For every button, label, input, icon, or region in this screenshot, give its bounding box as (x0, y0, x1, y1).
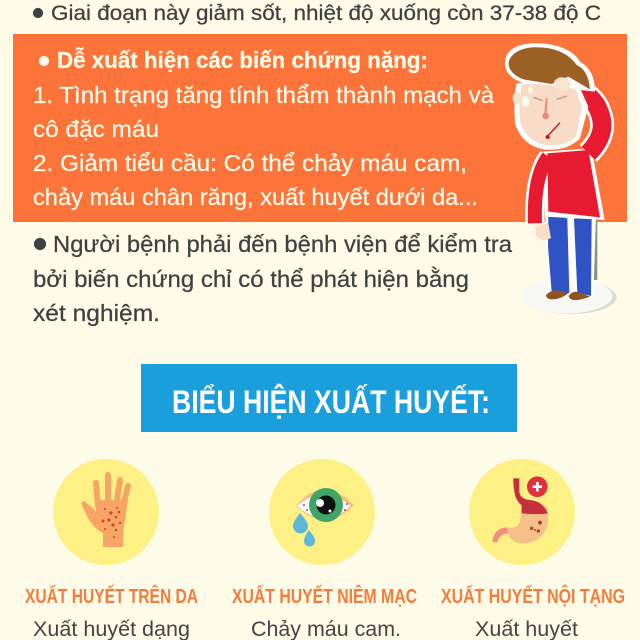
hospital advice text (33, 231, 513, 326)
hospital advice text: bởi biến chứng chỉ có thể phát hiện bằng (33, 266, 469, 292)
icon: hand with rash (53, 459, 159, 565)
icon: sick person (505, 43, 617, 314)
heading: XUẤT HUYẾT NIÊM MẠC (232, 584, 417, 608)
complications text: Dễ xuất hiện các biến chứng nặng: (57, 46, 428, 73)
icon: bleeding eye (269, 459, 375, 565)
hospital advice text: Người bệnh phải đến bệnh viện để kiểm tra (53, 231, 513, 257)
icon: stomach (469, 459, 575, 565)
complications text: 2. Giảm tiểu cầu: Có thể chảy máu cam, (33, 150, 467, 176)
column: internal bleeding (441, 459, 625, 640)
intro text line: Giai đoạn này giảm sốt, nhiệt độ xuống còn 37-38 độ C (51, 2, 601, 25)
hospital advice text: xét nghiệm. (33, 300, 160, 326)
section banner (141, 364, 517, 432)
complications text (33, 46, 495, 210)
banner title: BIỂU HIỆN XUẤT HUYẾT: (172, 384, 490, 420)
column: mucosal bleeding (232, 459, 417, 640)
complications text: 1. Tình trạng tăng tính thẩm thành mạch và (33, 82, 495, 108)
panel: complications (13, 34, 627, 222)
column: skin bleeding (25, 459, 198, 640)
complications text: chảy máu chân răng, xuất huyết dưới da... (33, 184, 478, 210)
heading: XUẤT HUYẾT TRÊN DA (25, 584, 198, 608)
complications text: cô đặc máu (33, 116, 159, 142)
